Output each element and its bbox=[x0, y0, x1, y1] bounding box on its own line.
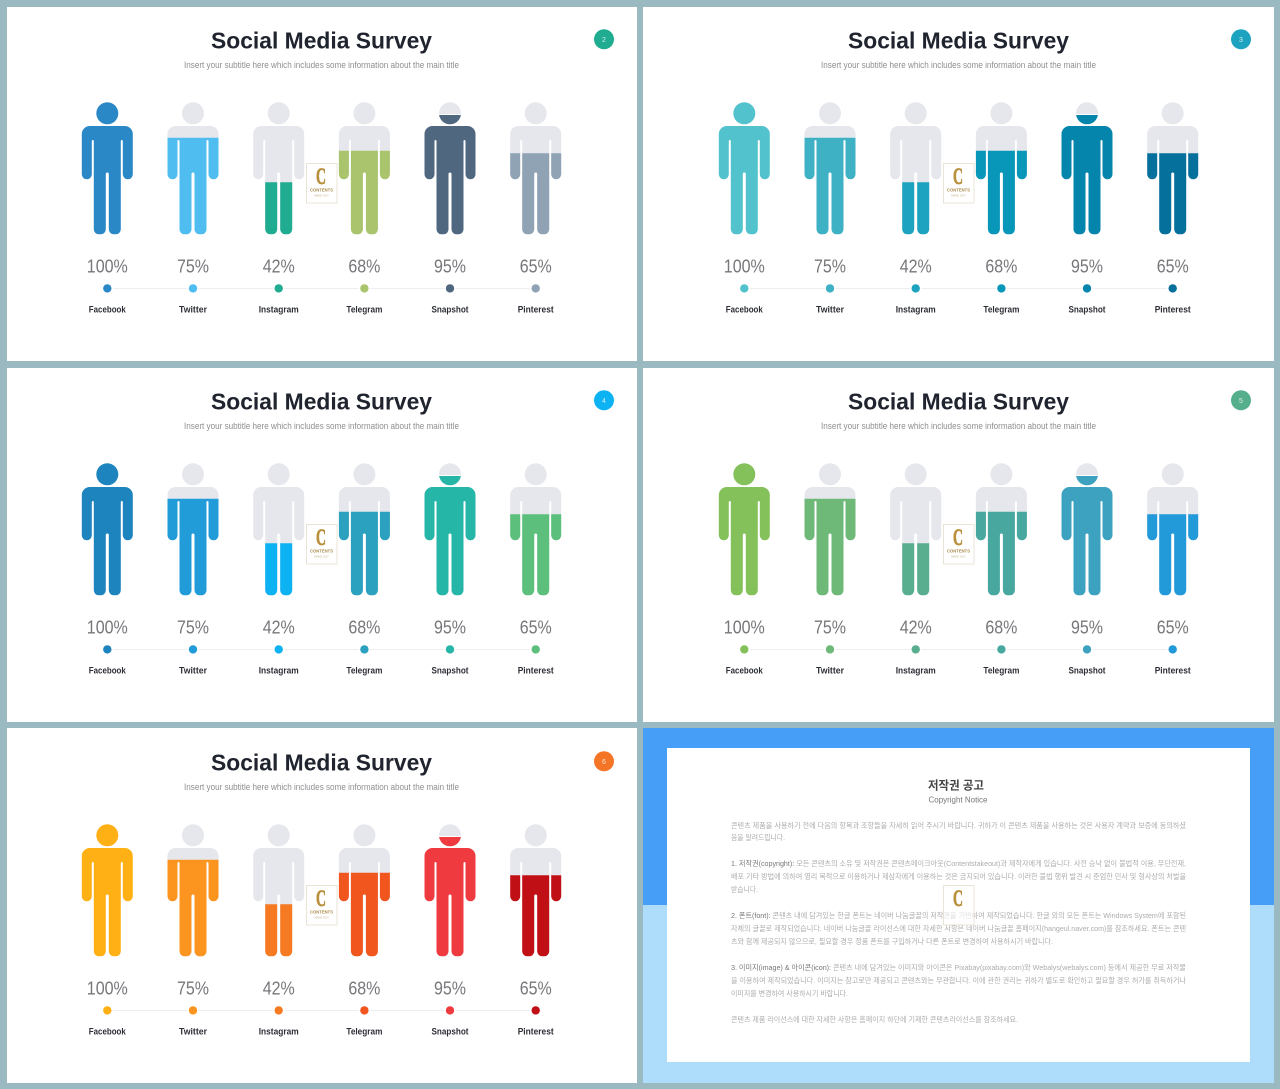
page badge bbox=[594, 390, 614, 410]
watermark: MAKE OUT bbox=[314, 916, 329, 920]
watermark: CONTENTS bbox=[947, 548, 970, 554]
notice section 3: 을 이용하여 제작되었습니다. 이미지는 참고로만 제공되고 콘텐츠와는 무관합니다. 이에 관한 권리는 귀하가 별도로 확인하고 필요할 경우 허가를 취득하거나 bbox=[731, 976, 1186, 985]
column: Instagram: Instagram bbox=[259, 665, 299, 675]
column: Instagram: Instagram bbox=[896, 304, 936, 314]
watermark: C bbox=[953, 525, 963, 550]
column: Facebook bbox=[82, 463, 133, 675]
notice section 2: 2. 폰트(font): 콘텐츠 내에 담겨있는 한글 폰트는 네이버 나눔글꼴의 저작권을 기반하여 제작되었습니다. 한글 외의 모든 폰트는 Windows System에 포함된 bbox=[731, 911, 1186, 920]
notice footer line: 콘텐츠 제품 라이선스에 대한 자세한 사항은 홈페이지 하단에 기재한 콘텐츠라이선스를 참조하세요. bbox=[731, 1015, 1018, 1024]
column: Twitter: Twitter bbox=[816, 304, 844, 314]
column: Instagram: 42% bbox=[900, 618, 932, 638]
page badge: 5 bbox=[1239, 398, 1243, 405]
column: Pinterest: Pinterest bbox=[1155, 304, 1191, 314]
column: Pinterest: 65% bbox=[1157, 618, 1189, 638]
title: Social Media Survey bbox=[848, 388, 1069, 414]
title: Social Media Survey bbox=[848, 28, 1069, 54]
column: Instagram: Instagram bbox=[896, 665, 936, 675]
column: Instagram: 42% bbox=[263, 979, 295, 999]
watermark: C bbox=[316, 525, 326, 550]
column: Telegram: 68% bbox=[348, 618, 380, 638]
column: Telegram bbox=[339, 463, 390, 675]
column: Pinterest bbox=[1147, 102, 1198, 314]
column: Instagram bbox=[890, 102, 941, 314]
subtitle: Insert your subtitle here which includes some information about the main title bbox=[821, 60, 1096, 70]
column: Pinterest bbox=[510, 463, 561, 675]
column: Twitter: 75% bbox=[177, 979, 209, 999]
column: Snapshot: Snapshot bbox=[1068, 304, 1106, 314]
column: Instagram: 42% bbox=[900, 257, 932, 277]
panel: survey slide 2 bbox=[7, 7, 637, 361]
watermark bbox=[306, 164, 337, 203]
subtitle: Insert your subtitle here which includes some information about the main title bbox=[184, 782, 459, 792]
page badge bbox=[1231, 29, 1251, 49]
column: Telegram: Telegram bbox=[983, 304, 1019, 314]
column: Snapshot: 95% bbox=[1071, 257, 1103, 277]
column: Facebook bbox=[719, 102, 770, 314]
column: Facebook: 100% bbox=[724, 257, 765, 277]
column: Facebook: Facebook bbox=[89, 304, 127, 314]
column: Snapshot: Snapshot bbox=[432, 1026, 468, 1036]
column: Twitter bbox=[804, 463, 856, 675]
column: Telegram: 68% bbox=[985, 618, 1017, 638]
column: Pinterest: Pinterest bbox=[518, 304, 554, 314]
watermark bbox=[944, 524, 974, 564]
panel: survey slide 5 bbox=[643, 368, 1274, 722]
column: Twitter: 75% bbox=[177, 618, 209, 638]
column: Instagram bbox=[890, 463, 941, 675]
page badge bbox=[594, 751, 614, 771]
column: Snapshot bbox=[1062, 102, 1112, 314]
column: Pinterest: Pinterest bbox=[518, 1026, 554, 1036]
notice intro: 음을 알려드립니다. bbox=[731, 833, 785, 842]
watermark bbox=[944, 164, 974, 203]
column: Telegram: 68% bbox=[348, 257, 380, 277]
watermark bbox=[306, 886, 337, 925]
page badge: 4 bbox=[602, 398, 606, 405]
column: Facebook: Facebook bbox=[726, 665, 764, 675]
notice section 1 bbox=[731, 859, 1186, 894]
panel: survey slide 3 bbox=[643, 7, 1274, 361]
column: Snapshot bbox=[424, 824, 476, 1036]
notice section 3 bbox=[731, 963, 1186, 998]
watermark: C bbox=[316, 164, 326, 189]
page badge: 6 bbox=[602, 759, 606, 766]
column: Twitter: Twitter bbox=[179, 665, 207, 675]
notice section 1: 1. 저작권(copyright): 모든 콘텐츠의 소유 및 저작권은 콘텐츠메이크아웃(Contentstakeout)과 제작자에게 있습니다. 사전 승낙 없이 불법적 이용, 무단전재, bbox=[731, 859, 1186, 868]
panel: survey slide 4 bbox=[7, 368, 637, 722]
column: Pinterest: 65% bbox=[520, 618, 552, 638]
title: Social Media Survey bbox=[211, 388, 432, 414]
column: Facebook bbox=[82, 824, 133, 1036]
column: Twitter bbox=[168, 463, 218, 675]
column: Twitter: Twitter bbox=[816, 665, 844, 675]
column: Snapshot: Snapshot bbox=[432, 304, 468, 314]
title: Social Media Survey bbox=[211, 28, 432, 54]
subtitle: Insert your subtitle here which includes some information about the main title bbox=[184, 60, 459, 70]
watermark: C bbox=[953, 164, 963, 189]
watermark: C bbox=[316, 886, 326, 911]
notice intro: 콘텐츠 제품을 사용하기 전에 다음의 항목과 조항들을 자세히 읽어 주시기 바랍니다. 귀하가 이 콘텐츠 제품을 사용하는 것은 사용자 계약과 보증에 동의하셨 bbox=[731, 821, 1186, 830]
watermark: CONTENTS bbox=[310, 188, 333, 192]
column: Twitter bbox=[804, 102, 856, 314]
column: Telegram bbox=[976, 463, 1027, 675]
column: Twitter: Twitter bbox=[179, 1026, 207, 1036]
column: Pinterest bbox=[510, 824, 561, 1036]
column: Pinterest: 65% bbox=[1157, 257, 1189, 277]
column: Instagram: 42% bbox=[263, 618, 295, 638]
column: Snapshot bbox=[1062, 463, 1112, 675]
column: Snapshot: 95% bbox=[1071, 618, 1103, 638]
notice section 3: 3. 이미지(image) & 아이콘(icon): 콘텐츠 내에 담겨있는 이미지와 아이콘은 Pixabay(pixabay.com)와 Webalys(webalys.com) 등에서 제공한 무료 저작물 bbox=[731, 963, 1186, 972]
column: Snapshot: 95% bbox=[434, 979, 466, 999]
column: Telegram bbox=[339, 824, 390, 1036]
column: Telegram: Telegram bbox=[346, 1026, 382, 1036]
column: Telegram: 68% bbox=[348, 979, 380, 999]
column: Telegram: Telegram bbox=[346, 665, 382, 675]
column: Telegram: 68% bbox=[985, 257, 1017, 277]
watermark bbox=[306, 524, 337, 564]
page badge bbox=[594, 29, 614, 49]
watermark: CONTENTS bbox=[310, 548, 333, 554]
column: Pinterest: Pinterest bbox=[518, 665, 554, 675]
column: Instagram bbox=[253, 824, 304, 1036]
column: Twitter: 75% bbox=[814, 618, 846, 638]
page badge: 3 bbox=[1239, 37, 1243, 44]
notice heading: 저작권 공고 bbox=[928, 778, 984, 792]
column: Snapshot: 95% bbox=[434, 257, 466, 277]
notice section 1: 받습니다. bbox=[731, 885, 758, 894]
column: Twitter: Twitter bbox=[179, 304, 207, 314]
notice section 3: 이미지를 변경하여 사용하시기 바랍니다. bbox=[731, 989, 848, 998]
column: Facebook: 100% bbox=[87, 257, 128, 277]
column: Twitter: 75% bbox=[177, 257, 209, 277]
column: Pinterest bbox=[510, 102, 561, 314]
column: Telegram bbox=[339, 102, 390, 314]
column: Twitter: 75% bbox=[814, 257, 846, 277]
column: Facebook: Facebook bbox=[726, 304, 764, 314]
column: Pinterest bbox=[1147, 463, 1198, 675]
column: Facebook: 100% bbox=[87, 979, 128, 999]
column: Instagram: Instagram bbox=[259, 304, 299, 314]
column: Snapshot: Snapshot bbox=[432, 665, 468, 675]
watermark: MAKE OUT bbox=[314, 554, 329, 558]
column: Facebook: Facebook bbox=[89, 1026, 127, 1036]
column: Snapshot: Snapshot bbox=[1068, 665, 1106, 675]
panel: copyright notice bbox=[643, 728, 1274, 1083]
notice intro bbox=[731, 821, 1186, 842]
column: Facebook: 100% bbox=[87, 618, 128, 638]
watermark: MAKE OUT bbox=[951, 554, 966, 558]
subtitle: Insert your subtitle here which includes some information about the main title bbox=[821, 421, 1096, 431]
subtitle: Insert your subtitle here which includes some information about the main title bbox=[184, 421, 459, 431]
notice section 2: 츠와 함께 제공되지 않으므로, 필요할 경우 정품 폰트를 구입하거나 다른 폰트로 변경하여 사용하시기 바랍니다. bbox=[731, 937, 1053, 946]
column: Snapshot bbox=[424, 463, 476, 675]
column: Facebook: Facebook bbox=[89, 665, 127, 675]
column: Telegram: Telegram bbox=[346, 304, 382, 314]
column: Snapshot bbox=[424, 102, 476, 314]
page badge bbox=[1231, 390, 1251, 410]
panel: survey slide 6 bbox=[7, 728, 637, 1083]
column: Telegram: Telegram bbox=[983, 665, 1019, 675]
title: Social Media Survey bbox=[211, 750, 432, 776]
watermark: CONTENTS bbox=[310, 910, 333, 914]
watermark: C bbox=[953, 886, 963, 911]
notice subheading: Copyright Notice bbox=[928, 794, 988, 804]
column: Pinterest: Pinterest bbox=[1155, 665, 1191, 675]
watermark: MAKE OUT bbox=[951, 194, 966, 198]
watermark: CONTENTS bbox=[947, 188, 970, 192]
column: Instagram bbox=[253, 463, 304, 675]
notice section 1: 배포 기타 방법에 의하여 영리 목적으로 이용하거나 제삼자에게 이용하는 것은 금지되어 있습니다. 이러한 불법 행위 발견 시 준엄한 민사 및 형사상의 처벌을 bbox=[731, 872, 1186, 881]
notice section 2 bbox=[731, 911, 1186, 946]
notice section 2: 자체의 글꼴로 제작되었습니다. 네이버 나눔글꼴 라이선스에 대한 자세한 사항은 네이버 나눔글꼴 홈페이지(hangeul.naver.com)를 참조하세요. 폰트는 콘텐 bbox=[731, 924, 1186, 933]
watermark bbox=[944, 886, 974, 925]
column: Pinterest: 65% bbox=[520, 979, 552, 999]
column: Facebook bbox=[719, 463, 770, 675]
column: Pinterest: 65% bbox=[520, 257, 552, 277]
watermark: MAKE OUT bbox=[314, 194, 329, 198]
column: Facebook bbox=[82, 102, 133, 314]
column: Instagram bbox=[253, 102, 304, 314]
column: Instagram: Instagram bbox=[259, 1026, 299, 1036]
column: Snapshot: 95% bbox=[434, 618, 466, 638]
column: Twitter bbox=[168, 102, 218, 314]
column: Twitter bbox=[168, 824, 218, 1036]
page badge: 2 bbox=[602, 37, 606, 44]
column: Telegram bbox=[976, 102, 1027, 314]
column: Instagram: 42% bbox=[263, 257, 295, 277]
column: Facebook: 100% bbox=[724, 618, 765, 638]
